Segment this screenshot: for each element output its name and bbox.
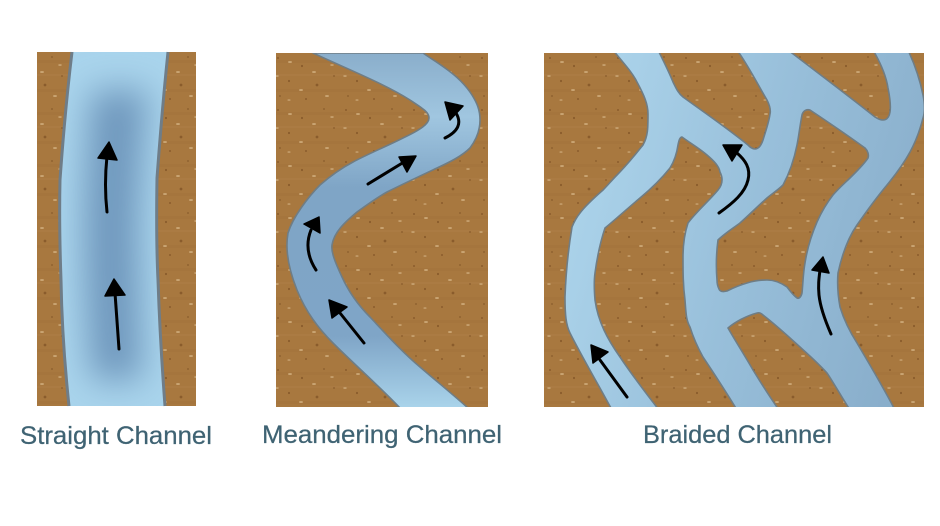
water background [544, 53, 924, 407]
arrow: meander lower flow [329, 300, 364, 343]
bar: upper right [788, 50, 890, 120]
bar: upper middle [658, 50, 770, 149]
label: straight channel: Straight Channel [20, 422, 212, 450]
soil bars [540, 50, 930, 410]
arrow: meander crossing flow [368, 156, 416, 184]
panel: braided channel [540, 50, 930, 410]
arrow: upper straight flow [98, 142, 117, 212]
meandering river [287, 53, 480, 408]
arrow: meander lower bend [304, 217, 320, 270]
straight river [60, 52, 168, 406]
panel: meandering channel [276, 53, 488, 408]
bar: far right bank [838, 50, 930, 410]
panel: straight channel [37, 52, 196, 406]
arrow: braided right curve [812, 257, 831, 334]
label: braided channel: Braided Channel [643, 421, 832, 449]
arrow: braided left flow [591, 345, 627, 397]
bar: centre [716, 110, 868, 298]
soil background [37, 52, 196, 406]
arrow: lower straight flow [105, 279, 125, 349]
bar: left centre [594, 137, 737, 410]
soil background [276, 53, 488, 407]
bar: far left bank [540, 50, 648, 410]
bar: lower middle [728, 313, 850, 410]
arrow: meander upper bend [445, 102, 463, 138]
label: meandering channel: Meandering Channel [262, 421, 502, 449]
arrow: braided centre curve [719, 145, 749, 213]
